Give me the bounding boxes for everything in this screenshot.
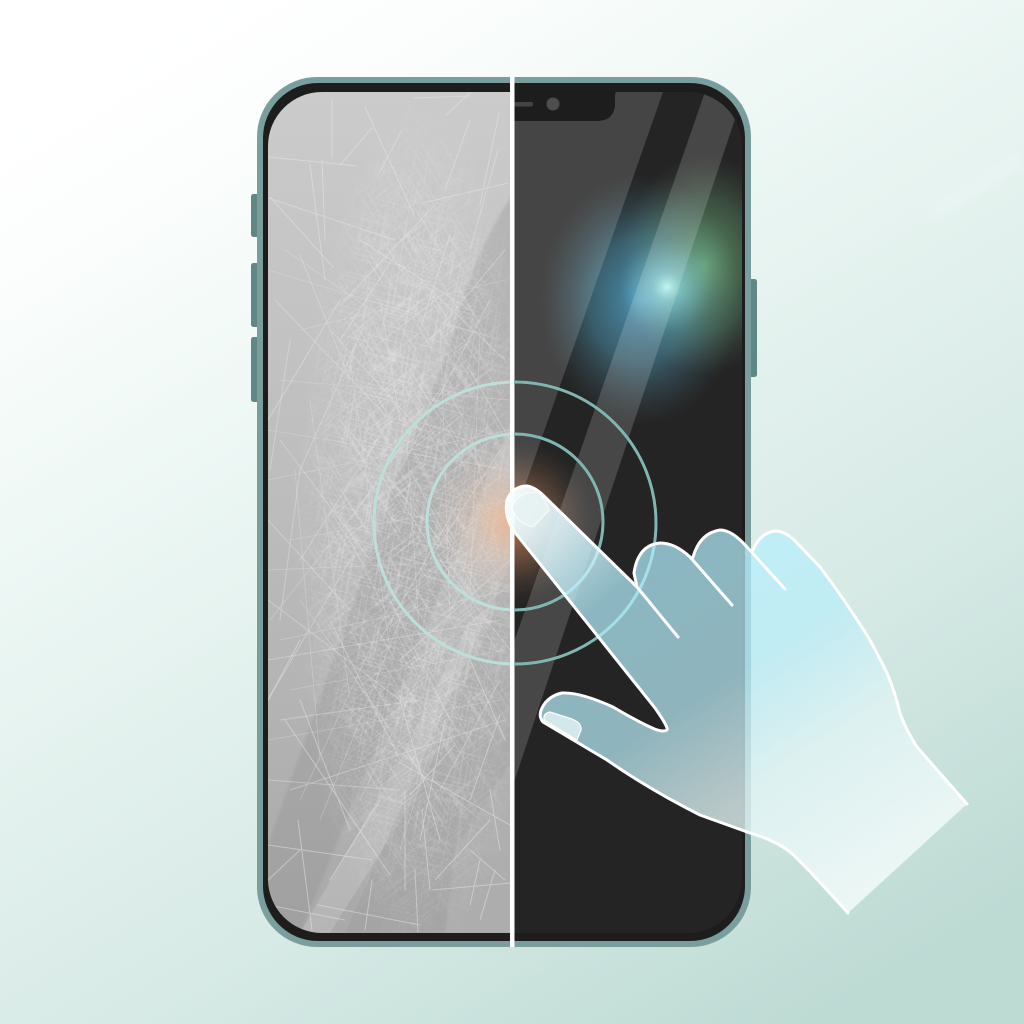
gray reflection stripe xyxy=(514,92,744,782)
green glow xyxy=(632,168,742,364)
thumbnail xyxy=(544,712,581,740)
worn diagonal bands xyxy=(268,195,512,933)
faint light streak xyxy=(925,152,1020,215)
hand xyxy=(506,486,967,913)
fine scratch texture xyxy=(310,175,510,922)
hand outline xyxy=(506,486,967,913)
camera xyxy=(546,98,560,110)
blue glow xyxy=(550,186,730,414)
long scratches xyxy=(268,90,510,932)
side buttons xyxy=(251,194,757,402)
phone body xyxy=(257,77,751,947)
orange touch glow left xyxy=(450,467,510,583)
touch ripple rings xyxy=(374,382,656,664)
index finger highlight xyxy=(506,486,640,634)
divider line xyxy=(510,77,514,947)
index fingernail xyxy=(512,493,549,526)
notch xyxy=(514,83,640,121)
cyan glow core xyxy=(630,250,706,325)
hand fill xyxy=(506,486,967,913)
gray reflection panel xyxy=(514,92,663,517)
speaker xyxy=(514,102,533,106)
panel: scratched left screen xyxy=(268,92,510,933)
orange touch glow right xyxy=(514,451,585,594)
panel: clean right screen xyxy=(514,92,742,780)
